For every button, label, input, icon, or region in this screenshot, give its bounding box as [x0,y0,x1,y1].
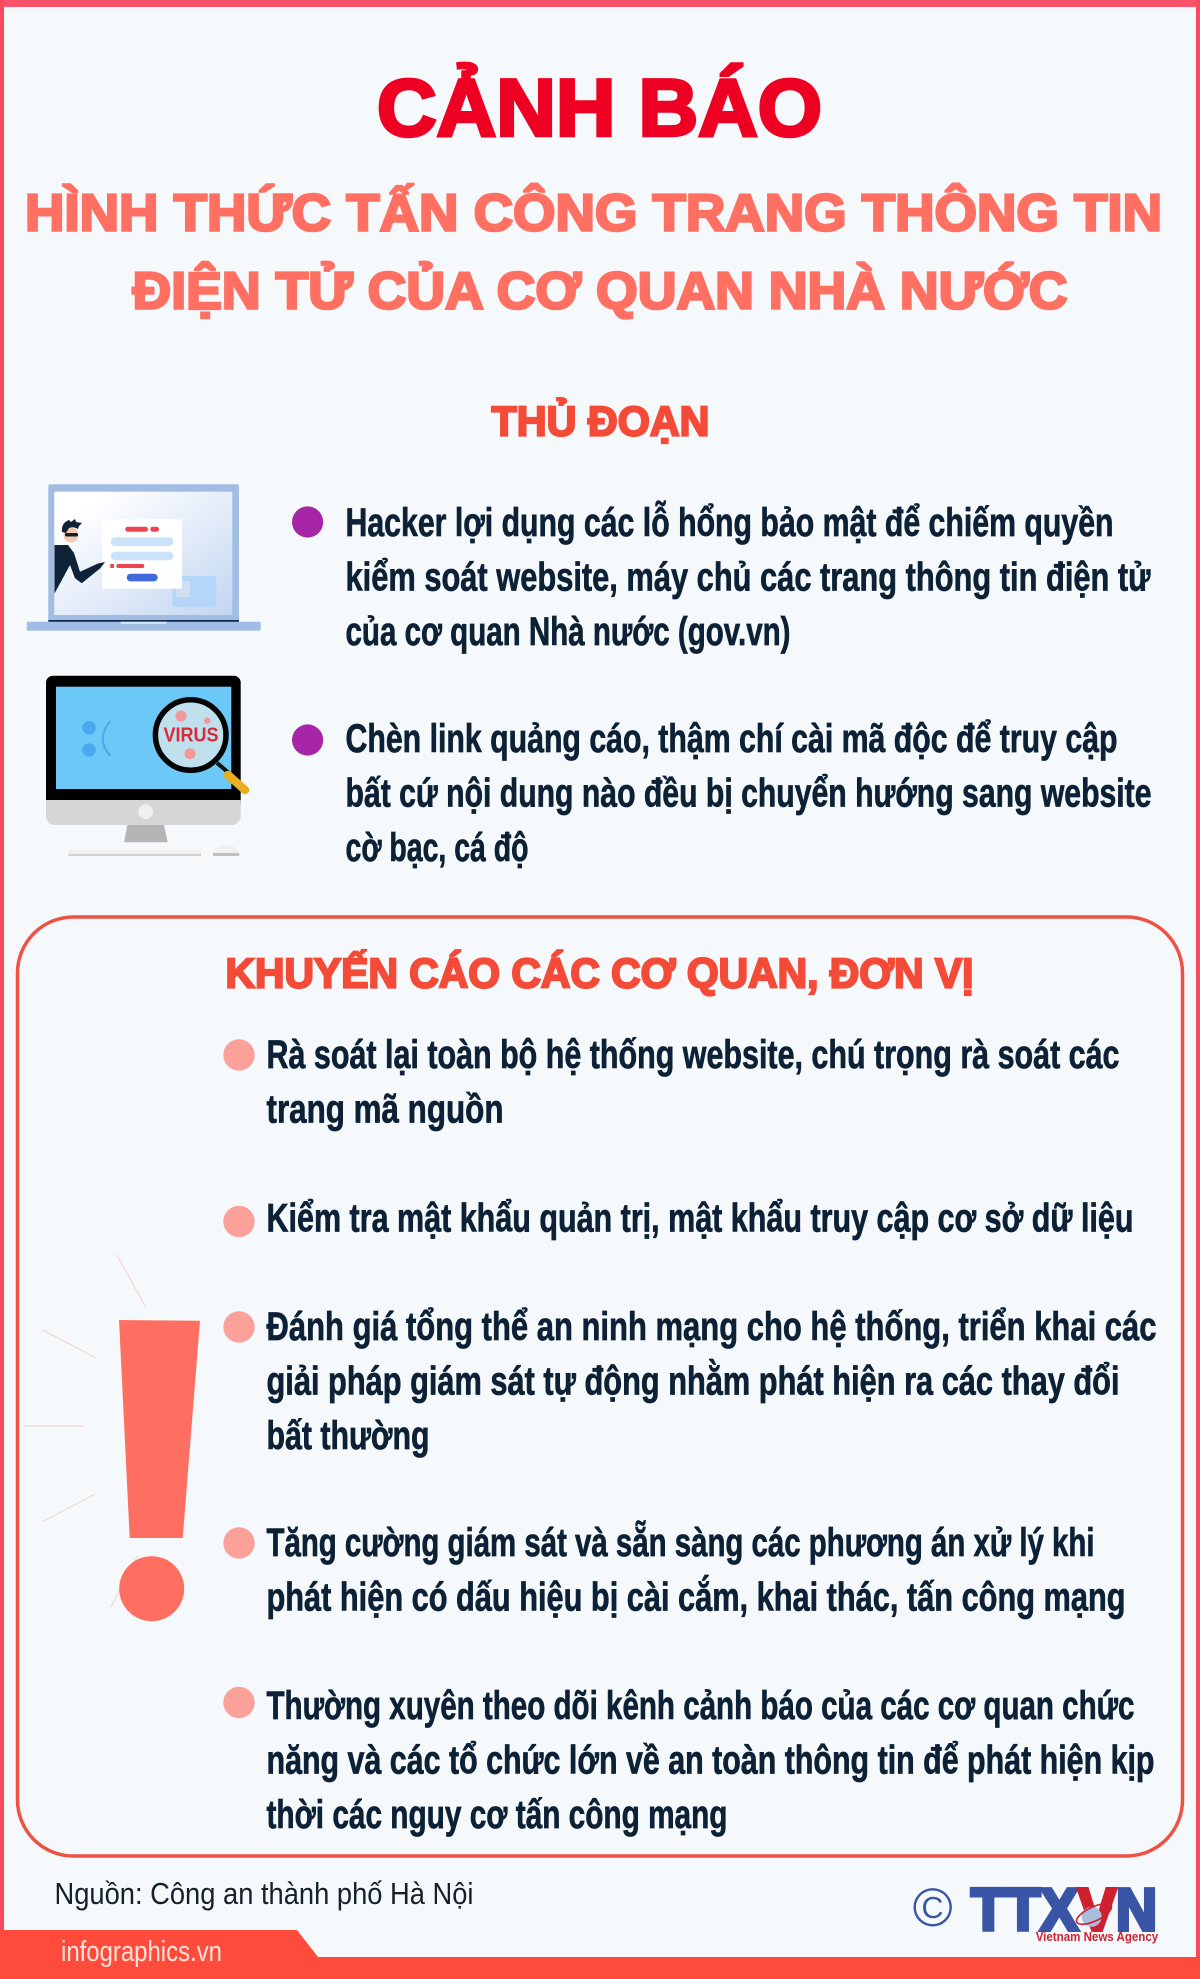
magnifier: VIRUS [164,724,218,746]
recommendation 5: thời các nguy cơ tấn công mạng [266,1793,728,1837]
heading: thủ đoạn: THỦ ĐOẠN [492,396,710,444]
bullet marker 2 [292,724,323,756]
subtitle [25,184,1162,320]
source line: Nguồn: Công an thành phố Hà Nội [54,1876,474,1911]
bullet marker 1 [292,506,323,538]
text block: thủ đoạn 1 [346,499,1151,654]
subtitle: ĐIỆN TỬ CỦA CƠ QUAN NHÀ NƯỚC [132,262,1068,320]
hacker figure [54,519,105,594]
recommendation 3: bất thường [266,1414,430,1458]
icon: laptop with hacker [27,484,261,631]
logo: TTXVN: Vietnam News Agency [1036,1930,1158,1944]
icon: monitor with virus magnifier [46,676,245,856]
recommendation 1 [223,1033,1120,1132]
recommendation 4 [223,1519,1126,1620]
logo: TTXVN: C [922,1890,944,1925]
website label: infographics.vn [61,1936,222,1968]
panel: khuyến cáo [18,917,1182,1856]
recommendation 1: trang mã nguồn [266,1088,504,1132]
footer bar [0,1930,1200,1979]
recommendation 5 [223,1684,1155,1837]
text block: thủ đoạn 1: của cơ quan Nhà nước (gov.vn) [346,610,790,654]
icon: exclamation mark [24,1255,200,1621]
magnifier [155,700,245,790]
recommendation 3 [223,1305,1157,1458]
title: CẢNH BÁO [377,62,822,154]
heading: khuyến cáo: KHUYẾN CÁO CÁC CƠ QUAN, ĐƠN VỊ [226,950,974,996]
logo: TTXVN: TTXVN [971,1877,1157,1943]
subtitle: HÌNH THỨC TẤN CÔNG TRANG THÔNG TIN [25,184,1162,242]
text block: thủ đoạn 2: cờ bạc, cá độ [346,826,528,870]
text block: thủ đoạn 2 [346,717,1152,870]
